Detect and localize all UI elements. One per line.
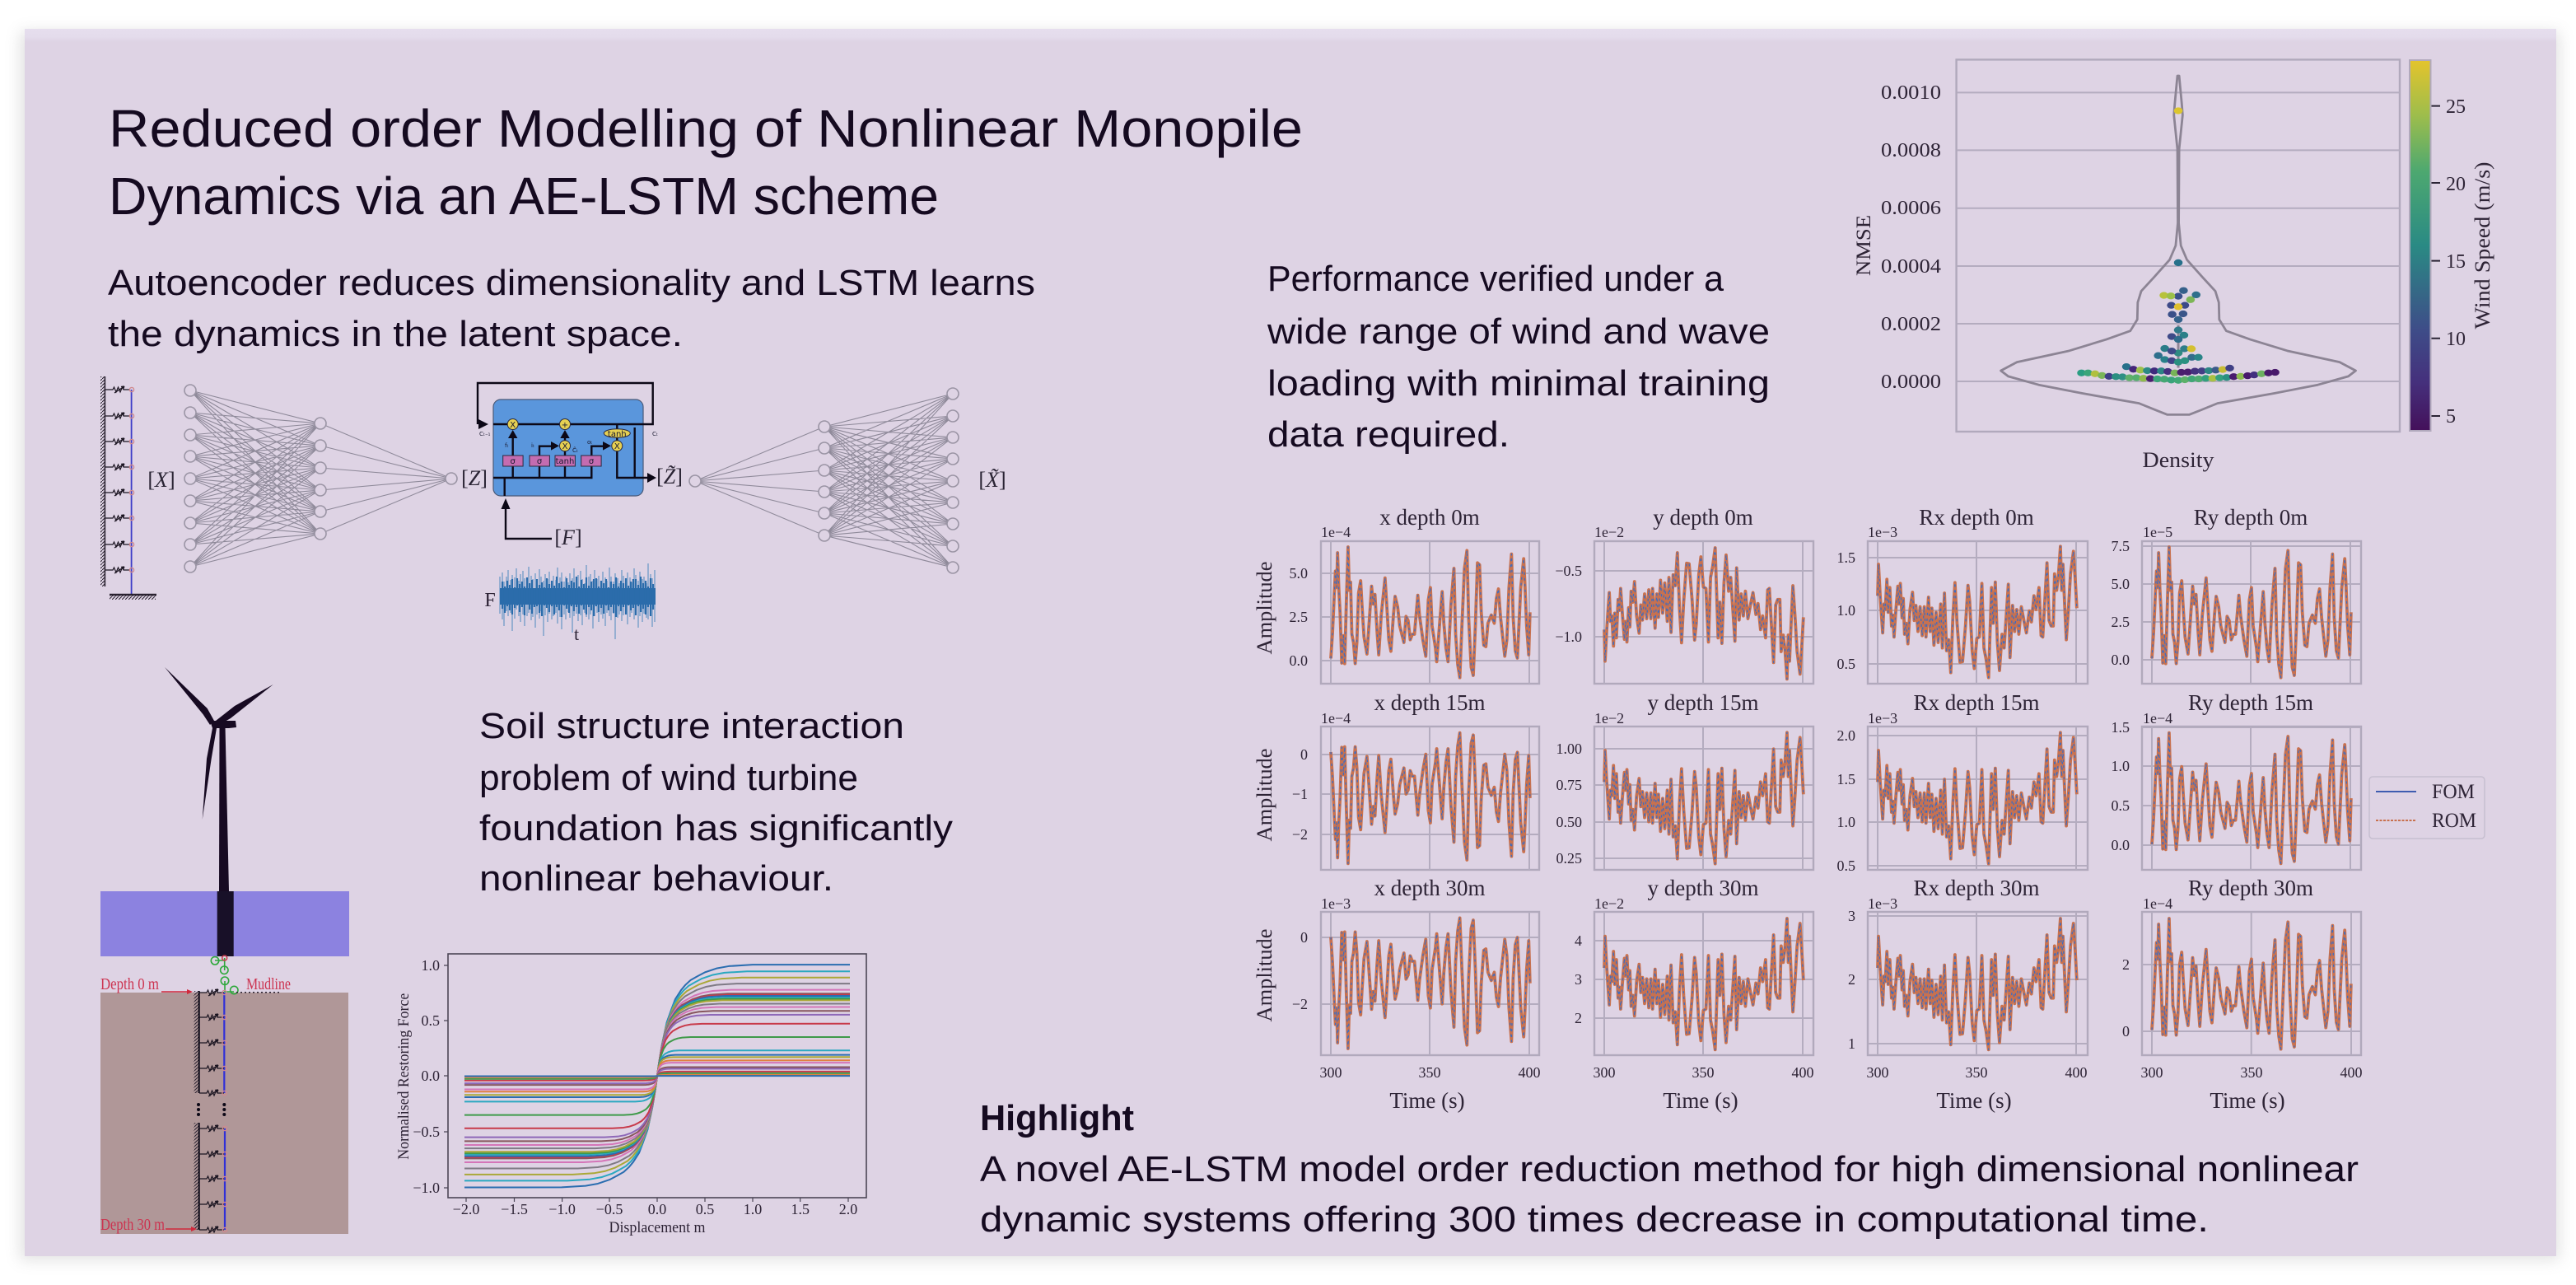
axis labels: −2.0 (453, 1201, 479, 1217)
chart: normalised restoring force (397, 953, 867, 1236)
chart: force time series: F (484, 590, 496, 611)
water (100, 891, 349, 956)
colorbar: 5 (2446, 406, 2456, 428)
subplot: x depth 15m: x depth 15m (1374, 690, 1486, 715)
subplot: y depth 0m: y depth 0m (1653, 505, 1753, 530)
subplot: y depth 0m: 1e−2 (1594, 524, 1624, 540)
subplot: Ry depth 15m: 1.0 (2112, 758, 2130, 774)
subplot: x depth 15m: −1 (1292, 786, 1308, 802)
colorbar: 20 (2446, 174, 2466, 195)
matrix labels: [Z] (461, 466, 488, 490)
subplot: Ry depth 15m: 1.5 (2112, 719, 2130, 736)
text block: performance: loading with minimal training (1267, 363, 1770, 404)
axis labels: −0.5 (413, 1124, 440, 1140)
axis labels: 0.0002 (1881, 314, 1941, 335)
green degrees of freedom (211, 956, 238, 994)
matrix labels: [Z̃] (656, 465, 683, 488)
subplot: x depth 15m: 1e−4 (1321, 710, 1351, 727)
subplot: Rx depth 30m: 300 (1866, 1064, 1889, 1081)
soil springs (194, 989, 280, 1233)
subplot: Ry depth 30m: 2 (2122, 956, 2130, 973)
subplot: Rx depth 15m: 1e−3 (1868, 710, 1897, 727)
highlight text: Highlight (980, 1098, 1134, 1138)
chart: force time series: t (574, 624, 579, 644)
subplot: Ry depth 0m: 2.5 (2112, 614, 2130, 630)
subplot: Ry depth 30m: Time (s) (2210, 1088, 2285, 1113)
subplot: y depth 30m: 400 (1792, 1064, 1813, 1081)
subplot: x depth 0m: 5.0 (1290, 565, 1308, 582)
highlight text: A novel AE-LSTM model order reduction method for high dimensional nonlinear (980, 1149, 2359, 1189)
text block: performance: data required. (1267, 414, 1510, 455)
subplot: Ry depth 30m: 1e−4 (2143, 895, 2172, 912)
subplot: Ry depth 0m: 7.5 (2112, 538, 2130, 554)
text block: autoencoder: Autoencoder reduces dimensionality and LSTM learns (108, 263, 1035, 303)
colorbar: 25 (2446, 96, 2466, 118)
axis labels: 1.0 (422, 957, 440, 974)
subplot: Ry depth 15m: 0.0 (2112, 837, 2130, 853)
subplot: x depth 30m: 350 (1418, 1064, 1441, 1081)
axis labels: −0.5 (596, 1201, 623, 1217)
subplot: Ry depth 0m: 1e−5 (2143, 524, 2172, 540)
chart: NMSE violin plot (1853, 59, 2494, 472)
subplot: y depth 15m (1556, 690, 1813, 870)
legend: FOM (2432, 781, 2475, 803)
subplot: Rx depth 30m: 2 (1848, 971, 1855, 988)
LSTM cell: X (510, 421, 516, 430)
axis labels: Density (2143, 448, 2214, 472)
LSTM cell (478, 383, 658, 496)
axis labels: 0.0 (648, 1201, 666, 1217)
subplot: x depth 15m: −2 (1292, 826, 1308, 843)
axis labels (395, 957, 857, 1236)
axis labels: 0.0 (422, 1068, 440, 1084)
subplot: Ry depth 30m (2122, 876, 2362, 1113)
swarm points (2077, 107, 2280, 384)
subplot: Rx depth 15m: Rx depth 15m (1914, 690, 2039, 715)
subplot: Ry depth 15m: 1e−4 (2143, 710, 2172, 727)
axis labels: 2.0 (839, 1201, 857, 1217)
force-displacement curves (464, 964, 850, 1188)
subplot: Rx depth 30m: 1 (1848, 1035, 1855, 1052)
subplot: Rx depth 30m: 3 (1848, 908, 1855, 924)
subplot: Rx depth 30m: 1e−3 (1868, 895, 1897, 912)
subplot: y depth 15m: 0.25 (1556, 850, 1582, 867)
LSTM cell: tanh (556, 457, 574, 466)
subplot: x depth 30m: Time (s) (1389, 1088, 1465, 1113)
LSTM cell: C̃ₜ (572, 447, 578, 454)
subplot: x depth 30m: −2 (1292, 996, 1308, 1012)
axis labels: 0.0000 (1881, 371, 1941, 393)
colorbar: Wind Speed (m/s) (2471, 161, 2494, 329)
text block: performance: wide range of wind and wave (1267, 311, 1770, 352)
violin outline (2001, 76, 2356, 414)
subplot: x depth 0m: 2.5 (1290, 609, 1308, 625)
subplot: y depth 30m: 3 (1575, 971, 1582, 988)
title: Dynamics via an AE-LSTM scheme (109, 166, 939, 226)
depth labels: Mudline (246, 975, 291, 993)
subplot: Ry depth 0m: 0.0 (2112, 652, 2130, 668)
axis labels: −1.0 (413, 1180, 440, 1196)
subplot: Ry depth 30m: 0 (2122, 1023, 2130, 1040)
subplot: Rx depth 30m (1848, 876, 2088, 1113)
axis labels: −1.5 (501, 1201, 528, 1217)
text block: soil structure interaction: Soil structure interaction (479, 706, 904, 746)
subplot: y depth 15m: 0.75 (1556, 777, 1582, 793)
axis labels: 0.0006 (1881, 198, 1941, 219)
subplot: Ry depth 0m: Ry depth 0m (2194, 505, 2308, 530)
subplot: x depth 30m: 400 (1519, 1064, 1540, 1081)
subplot: x depth 0m (1290, 505, 1539, 684)
colorbar (2410, 60, 2494, 431)
LSTM cell: oₜ (587, 439, 592, 446)
subplot: y depth 30m: 300 (1593, 1064, 1616, 1081)
LSTM cell: iₜ (531, 442, 534, 449)
matrix labels: [X] (147, 468, 175, 492)
colorbar: 10 (2446, 329, 2466, 350)
subplot: x depth 0m: 0.0 (1290, 652, 1308, 669)
subplot: Ry depth 30m: 300 (2141, 1064, 2163, 1081)
subplot: Ry depth 15m: Ry depth 15m (2188, 690, 2313, 715)
subplot: x depth 30m: 300 (1319, 1064, 1342, 1081)
decoder network (689, 388, 959, 573)
legend: ROM (2432, 810, 2476, 832)
colorbar: 15 (2446, 251, 2466, 273)
text block: performance: Performance verified under a (1267, 259, 1724, 299)
subplot: Rx depth 30m: 350 (1965, 1064, 1988, 1081)
y-axis labels: Amplitude: Amplitude (1253, 929, 1276, 1021)
subplot: Rx depth 15m (1836, 690, 2088, 874)
subplot: y depth 30m (1575, 876, 1813, 1113)
axis labels (1853, 82, 2214, 472)
axis labels: 0.5 (422, 1012, 440, 1029)
subplot: Rx depth 0m: 0.5 (1836, 656, 1855, 672)
subplot: Rx depth 0m: 1e−3 (1868, 524, 1897, 540)
LSTM cell: fₜ (505, 442, 509, 449)
legend (2369, 777, 2485, 839)
subplot: y depth 0m: −1.0 (1555, 628, 1582, 645)
LSTM cell: σ (511, 457, 516, 466)
y-axis labels: Amplitude: Amplitude (1253, 748, 1276, 842)
depth labels: Depth 30 m (100, 1216, 165, 1234)
subplot: y depth 15m: y depth 15m (1647, 690, 1759, 715)
subplot: Rx depth 15m: 1.0 (1836, 814, 1855, 830)
subplot: y depth 30m: 350 (1692, 1064, 1715, 1081)
LSTM cell: X (614, 442, 620, 451)
chart: force time series (484, 563, 656, 644)
matrix labels (147, 465, 1006, 549)
subplot: Rx depth 30m: 400 (2065, 1064, 2087, 1081)
text block: soil structure interaction (479, 706, 953, 899)
subplot: Rx depth 30m: Time (s) (1936, 1088, 2012, 1113)
LSTM cell: σ (589, 457, 595, 466)
title (109, 99, 1303, 226)
subplot: Rx depth 15m: 1.5 (1836, 771, 1855, 787)
subplot: y depth 0m (1555, 505, 1813, 684)
subplot: Ry depth 30m: Ry depth 30m (2188, 876, 2313, 900)
arrow: force input (501, 498, 552, 539)
subplot: Ry depth 30m: 400 (2340, 1064, 2362, 1081)
diagram: autoencoder LSTM architecture (100, 376, 1006, 644)
subplot: y depth 30m: y depth 30m (1647, 876, 1759, 900)
subplot: x depth 0m: x depth 0m (1379, 505, 1480, 530)
subplot: y depth 30m: 1e−2 (1594, 895, 1624, 912)
subplot: y depth 30m: 4 (1575, 932, 1582, 949)
subplot: y depth 0m: −0.5 (1555, 563, 1582, 579)
axis labels: Normalised Restoring Force (395, 993, 413, 1160)
axis labels: 0.0010 (1881, 82, 1941, 104)
text block: autoencoder: the dynamics in the latent space. (108, 314, 683, 354)
diagram: wind turbine and soil springs (100, 667, 349, 1234)
text block: soil structure interaction: nonlinear behaviour. (479, 858, 833, 899)
LSTM cell: Cₜ (652, 431, 658, 437)
subplot: y depth 30m: 2 (1575, 1010, 1582, 1026)
subplot: y depth 15m: 1.00 (1556, 741, 1582, 757)
subplot: Rx depth 0m: 1.0 (1836, 602, 1855, 619)
subplot: Rx depth 15m: 2.0 (1836, 727, 1855, 744)
matrix labels: [F] (554, 526, 582, 549)
subplot: Rx depth 0m: Rx depth 0m (1919, 505, 2034, 530)
subplot: x depth 30m: 1e−3 (1321, 895, 1351, 912)
soil (100, 993, 348, 1234)
title: Reduced order Modelling of Nonlinear Monopile (109, 99, 1303, 158)
subplot: Rx depth 0m (1836, 505, 2088, 684)
axis labels: Displacement m (609, 1219, 706, 1236)
text block: performance (1267, 259, 1770, 455)
subplot: x depth 15m (1292, 690, 1539, 870)
highlight text (980, 1098, 2359, 1240)
subplot: x depth 30m: 0 (1300, 929, 1308, 946)
axis labels: NMSE (1853, 215, 1875, 276)
subplot: Rx depth 30m: Rx depth 30m (1914, 876, 2039, 900)
LSTM cell: X (562, 442, 568, 451)
axis labels: 0.0004 (1881, 256, 1941, 278)
icon: wind turbine (165, 667, 273, 956)
text block: soil structure interaction: foundation has significantly (479, 808, 953, 848)
LSTM cell: Cₜ₋₁ (479, 431, 491, 437)
axis labels: 0.0008 (1881, 140, 1941, 161)
subplot: Rx depth 0m: 1.5 (1836, 549, 1855, 566)
subplot: Ry depth 0m: 5.0 (2112, 576, 2130, 592)
encoder network (184, 385, 457, 572)
subplot: Rx depth 15m: 0.5 (1836, 857, 1855, 874)
subplot: x depth 0m: 1e−4 (1321, 524, 1351, 540)
axis labels: −1.0 (548, 1201, 576, 1217)
y-axis labels: Amplitude: Amplitude (1253, 562, 1276, 654)
LSTM cell: + (562, 421, 568, 430)
subplot: Ry depth 30m: 350 (2240, 1064, 2263, 1081)
subplot: Ry depth 15m (2112, 690, 2361, 870)
subplot: y depth 30m: Time (s) (1663, 1088, 1738, 1113)
text block: soil structure interaction: problem of wind turbine (479, 758, 858, 798)
subplot: Ry depth 0m (2112, 505, 2361, 684)
subplot: y depth 15m: 0.50 (1556, 814, 1582, 830)
LSTM cell: σ (537, 457, 543, 466)
depth labels: Depth 0 m (100, 975, 159, 993)
matrix labels: [X̃] (978, 468, 1006, 492)
axis labels: 1.5 (791, 1201, 810, 1217)
axis labels: 0.5 (696, 1201, 714, 1217)
subplot: y depth 15m: 1e−2 (1594, 710, 1624, 727)
subplot: x depth 30m: x depth 30m (1374, 876, 1486, 900)
LSTM cell: tanh (608, 430, 627, 439)
icon: spring-supported beam (100, 376, 156, 600)
chart grid: FOM vs ROM time histories (1253, 505, 2485, 1113)
axis labels: 1.0 (744, 1201, 762, 1217)
subplot: Ry depth 15m: 0.5 (2112, 797, 2130, 814)
subplot: x depth 30m (1292, 876, 1540, 1113)
y-axis labels: Amplitude (1253, 562, 1276, 1021)
depth labels (100, 975, 291, 1234)
highlight text: dynamic systems offering 300 times decrease in computational time. (980, 1199, 2209, 1240)
text block: autoencoder (108, 263, 1035, 354)
subplot: x depth 15m: 0 (1300, 746, 1308, 763)
